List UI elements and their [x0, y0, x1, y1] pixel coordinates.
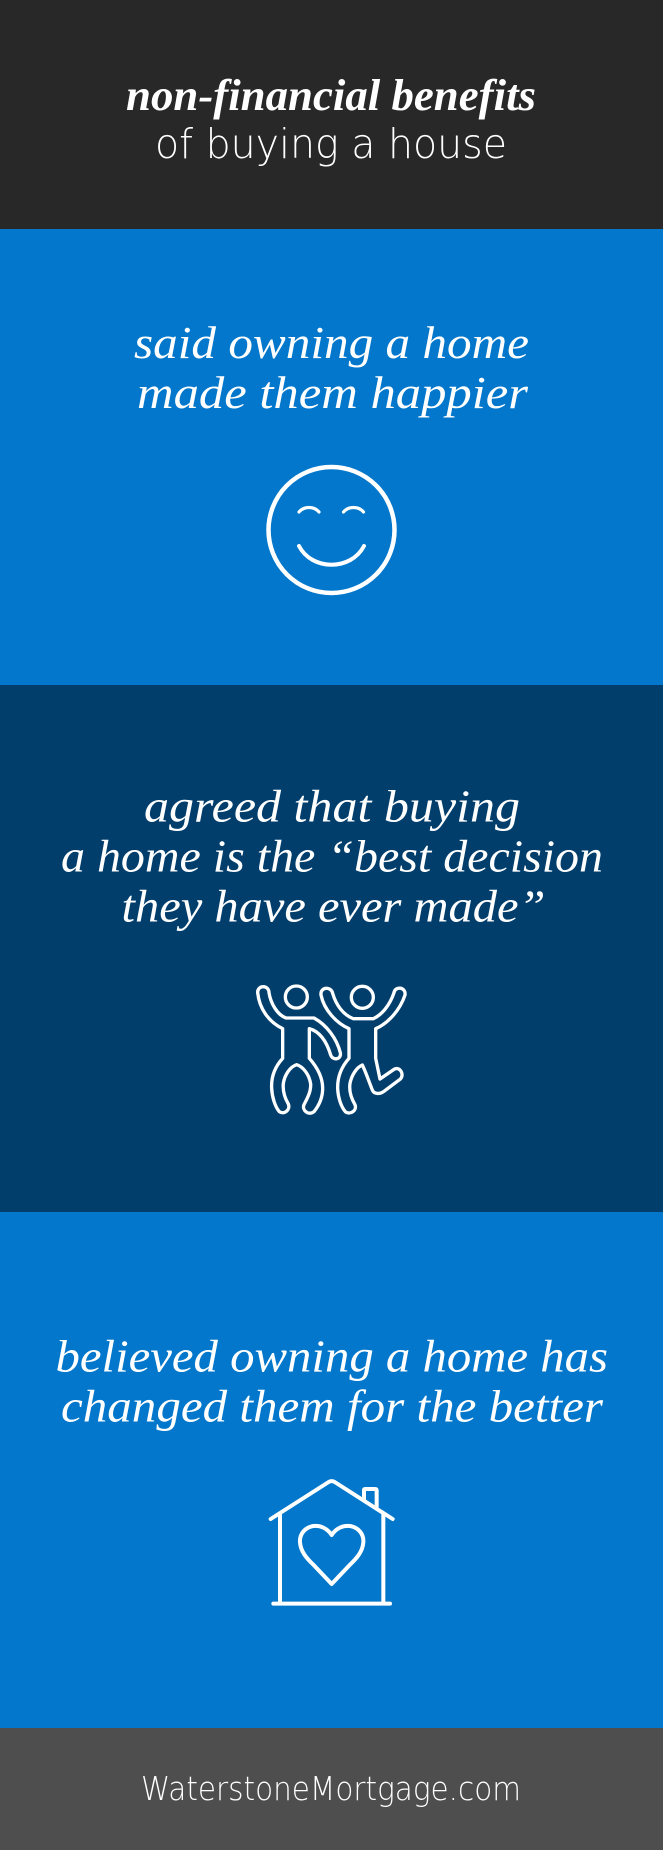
- title line 2: of buying a house: [155, 120, 507, 168]
- text: believed owning a home has changed them for the better: [56, 1330, 608, 1432]
- panel: best decision: [0, 685, 663, 1212]
- text: believed owning a home has changed them for the better: believed owning a home has: [56, 1330, 608, 1382]
- text: said owning a home made them happier: said owning a home: [134, 317, 529, 368]
- text: said owning a home made them happier: [134, 317, 529, 418]
- text: believed owning a home has changed them for the better: changed them for the better: [61, 1380, 604, 1432]
- panel: header: [0, 0, 663, 229]
- text: agreed that buying a home is the best decision they have ever made: they have ever made”: [122, 880, 546, 932]
- icon: two dancing people: [258, 986, 405, 1113]
- text: said owning a home made them happier: made them happier: [137, 367, 529, 418]
- text: website: WaterstoneMortgage.com: [141, 1769, 521, 1808]
- text: agreed that buying a home is the best decision they have ever made: agreed that buying: [144, 780, 520, 832]
- icon: smiling face: [268, 467, 394, 593]
- panel: happier: [0, 229, 663, 685]
- panel: changed for the better: [0, 1212, 663, 1728]
- title line 1: non-financial benefits: [126, 71, 536, 120]
- panel: footer: [0, 1728, 663, 1850]
- text: agreed that buying a home is the best decision they have ever made: a home is the “best decision: [61, 830, 603, 882]
- text: agreed that buying a home is the best decision they have ever made: [61, 780, 603, 932]
- icon: house with heart: [271, 1481, 393, 1604]
